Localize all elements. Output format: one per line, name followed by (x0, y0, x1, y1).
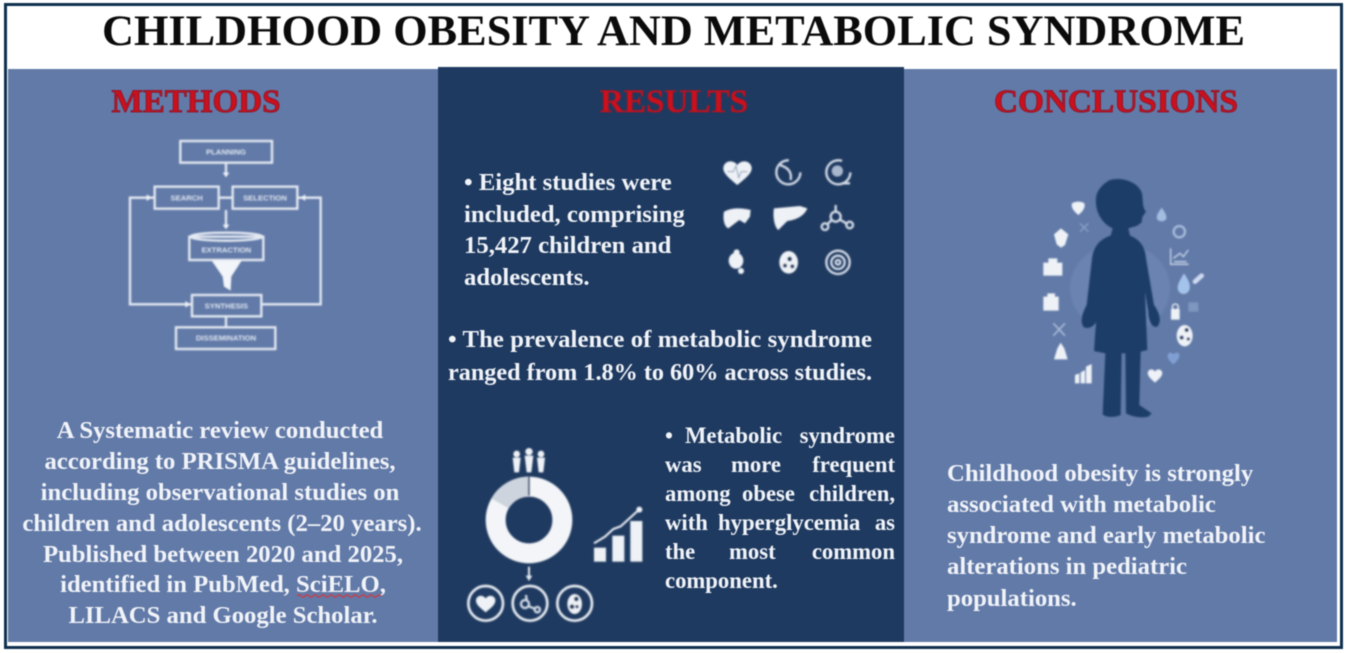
conclusions heading: CONCLUSIONS (994, 84, 1238, 120)
methods text: children and adolescents (2–20 years). (22, 510, 422, 537)
icon grid: metabolic conditions (723, 160, 853, 274)
icon: heart (1148, 369, 1162, 383)
icon: briefcase (1043, 258, 1062, 276)
illustration: child silhouette with health icons (1043, 179, 1202, 417)
icon: gauge (826, 160, 850, 184)
icon: heart (723, 161, 752, 185)
finding: studies included: adolescents. (464, 264, 590, 291)
icon: envelope (1188, 302, 1198, 312)
finding: studies included: • Eight studies were (464, 169, 672, 196)
icon: bars (1075, 364, 1092, 383)
icon: cross mark (1080, 223, 1088, 232)
finding: studies included (464, 169, 686, 291)
flowchart: PRISMA process: SELECTION (243, 193, 287, 202)
icon: circled heart (468, 586, 503, 621)
icon: heart pin (1072, 202, 1085, 215)
methods text: including observational studies on (41, 479, 400, 506)
icon: target rings (826, 251, 850, 274)
finding: prevalence (448, 326, 872, 386)
finding: studies included: included, comprising (464, 201, 686, 228)
finding: metabolic syndrome frequency: children, (809, 481, 895, 506)
conclusions text: associated with metabolic (947, 491, 1216, 518)
finding: metabolic syndrome frequency: obese (742, 481, 795, 506)
conclusions text: alterations in pediatric (947, 553, 1187, 580)
methods text: identified in PubMed, SciELO, (60, 571, 386, 598)
icon: lock (1171, 304, 1180, 320)
finding: metabolic syndrome frequency: Metabolic (685, 423, 782, 448)
finding: metabolic syndrome frequency: with (665, 510, 708, 535)
finding: metabolic syndrome frequency: was (665, 452, 702, 477)
finding: metabolic syndrome frequency: the (665, 539, 695, 564)
finding: metabolic syndrome frequency: frequent (812, 452, 895, 477)
icon: circled cell (557, 586, 592, 621)
methods heading: METHODS (112, 84, 280, 120)
flowchart: PRISMA process: DISSEMINATION (196, 334, 257, 343)
icon: chart (1171, 248, 1189, 264)
icon: circled molecule (513, 586, 547, 621)
panel: results (438, 67, 904, 642)
finding: metabolic syndrome frequency: component. (665, 568, 778, 593)
icon: molecule (822, 205, 853, 230)
finding: prevalence: ranged from 1.8% to 60% across studies. (448, 359, 872, 386)
icon: fatty liver (724, 208, 751, 228)
methods text: Published between 2020 and 2025, (43, 541, 403, 568)
finding: metabolic syndrome frequency: • (665, 423, 673, 448)
methods text: LILACS and Google Scholar. (68, 602, 378, 629)
panel: methods (8, 69, 438, 642)
icon: circular arrow (776, 160, 800, 184)
conclusions text: Childhood obesity is strongly (947, 460, 1254, 487)
methods text (22, 417, 422, 629)
finding: metabolic syndrome frequency: among (665, 481, 731, 506)
title: CHILDHOOD OBESITY AND METABOLIC SYNDROME (102, 8, 1245, 55)
icon: cell (1177, 325, 1193, 346)
icon: ring (1174, 226, 1185, 237)
halo (1070, 243, 1170, 333)
icon: droplet body (729, 249, 744, 274)
icon: cross (1053, 323, 1065, 336)
icon: bag (1043, 293, 1059, 311)
icon: liver (774, 206, 807, 230)
donut chart with icons (468, 448, 592, 621)
results background (438, 67, 904, 642)
results heading: RESULTS (600, 84, 748, 120)
flowchart: PRISMA process: SYNTHESIS (205, 301, 248, 310)
icon: rising bar chart (594, 507, 642, 562)
finding: metabolic syndrome frequency: more (731, 452, 781, 477)
flowchart: PRISMA process: SEARCH (170, 193, 203, 202)
flowchart: PRISMA process: PLANNING (206, 148, 246, 157)
methods background (8, 69, 438, 642)
finding: prevalence: • The prevalence of metabolic syndrome (448, 326, 872, 353)
panel: conclusions (904, 69, 1337, 642)
flowchart: PRISMA process: EXTRACTION (201, 245, 252, 254)
conclusions text: populations. (947, 585, 1077, 612)
health icons ring (1043, 202, 1202, 383)
icon: large droplet (1178, 273, 1190, 294)
finding: metabolic syndrome frequency: most (729, 539, 776, 564)
methods text: A Systematic review conducted (57, 417, 384, 444)
icon: cell (779, 251, 798, 274)
conclusions text: syndrome and early metabolic (947, 522, 1265, 549)
finding: metabolic syndrome frequency (665, 423, 895, 593)
icon: molecule (1054, 343, 1068, 359)
finding: metabolic syndrome frequency: as (875, 510, 895, 535)
conclusions text (947, 460, 1265, 612)
methods text: according to PRISMA guidelines, (44, 448, 396, 475)
child silhouette (1082, 179, 1160, 417)
flowchart: PRISMA process (130, 141, 321, 349)
icon: pill (1195, 276, 1202, 282)
donut (496, 476, 562, 553)
finding: metabolic syndrome frequency: common (812, 539, 895, 564)
finding: metabolic syndrome frequency: hyperglycemia (718, 510, 860, 535)
icon: people (513, 448, 545, 472)
icon: droplet (1157, 208, 1166, 221)
conclusions background (904, 69, 1337, 642)
icon: gem (1054, 228, 1068, 248)
finding: studies included: 15,427 children and (464, 232, 672, 259)
finding: metabolic syndrome frequency: syndrome (800, 423, 895, 448)
icon: blue heart (1168, 353, 1179, 364)
